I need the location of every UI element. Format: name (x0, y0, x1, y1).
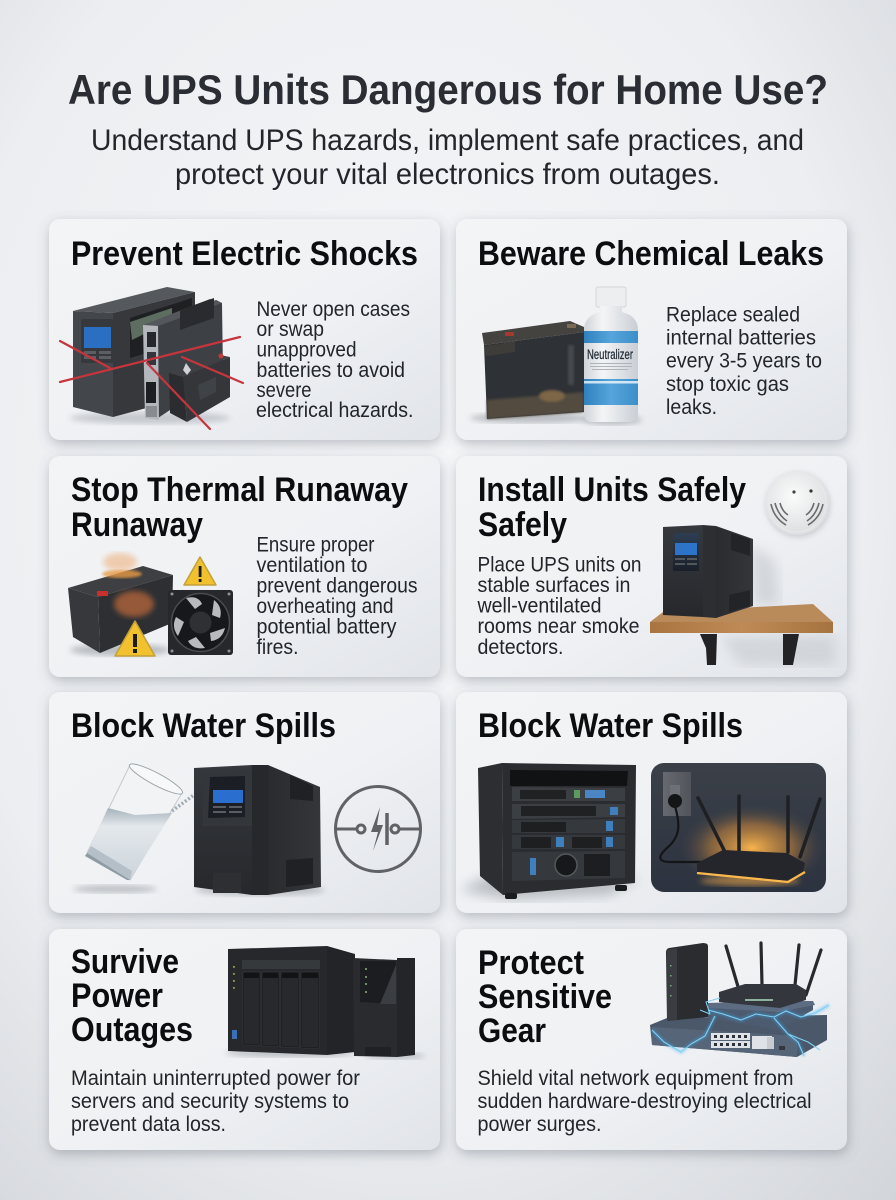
text: stop thermal runaway: fires. (256, 636, 298, 659)
heading: block water spills: Block Water Spills (478, 707, 743, 745)
heading: block water spills: Block Water Spills (71, 707, 336, 745)
text: protect sensitive gear: sudden hardware-destroying electrical (478, 1090, 812, 1113)
icon: electric surge arcs (652, 998, 829, 1056)
illustration: network switch stack (650, 1001, 827, 1057)
text: prevent electric shocks: batteries to avoid (256, 359, 405, 382)
heading: stop thermal runaway: Runaway (71, 506, 203, 544)
icon: warning triangle lower (115, 621, 155, 656)
text: beware chemical leaks: Replace sealed (666, 304, 800, 326)
panel: stop thermal runaway (49, 456, 440, 677)
illustration: UPS unit (194, 765, 325, 896)
icon: cooling fan (168, 590, 233, 655)
title: Are UPS Units Dangerous for Home Use? (68, 66, 828, 113)
illustration: router with glowing base (651, 763, 826, 892)
text: survive power outages: prevent data loss. (71, 1113, 226, 1136)
heading: install units safely: Install Units Safely (478, 471, 746, 509)
text: beware chemical leaks: leaks. (666, 396, 717, 419)
bottle label: Neutralizer (587, 347, 633, 362)
text: beware chemical leaks: internal batteries (666, 326, 816, 350)
illustration: NAS drive enclosure (225, 946, 355, 1057)
heading: survive power outages (71, 943, 193, 1049)
illustration: overheating battery (68, 553, 173, 656)
panel: protect sensitive gear (456, 929, 847, 1150)
text: survive power outages: Maintain uninterrupted power for (71, 1067, 360, 1090)
illustration: router on stack (719, 943, 821, 1008)
text: stop thermal runaway: ventilation to (256, 554, 368, 577)
text: survive power outages (71, 1067, 360, 1136)
panel: block water spills (rack and router) (456, 692, 847, 913)
panel: survive power outages (49, 929, 440, 1150)
text: install units safely: well-ventilated (477, 594, 602, 618)
icon: smoke detector (765, 471, 830, 537)
text: survive power outages: servers and security systems to (71, 1090, 349, 1113)
heading: stop thermal runaway (71, 471, 408, 544)
text: stop thermal runaway (256, 534, 418, 659)
text: prevent electric shocks: electrical hazards. (256, 399, 414, 422)
heading: install units safely (478, 471, 746, 544)
heading: prevent electric shocks: Prevent Electric Shocks (71, 235, 418, 273)
text: beware chemical leaks: stop toxic gas (666, 373, 789, 396)
text: protect sensitive gear: Shield vital network equipment from (478, 1067, 794, 1090)
text: beware chemical leaks (666, 304, 822, 419)
illustration: server rack (460, 763, 640, 900)
illustration: tilted glass of water (73, 760, 198, 893)
text: install units safely: rooms near smoke (478, 615, 640, 638)
subtitle (91, 124, 804, 191)
illustration: modem (666, 943, 708, 1021)
text: prevent electric shocks (256, 298, 414, 422)
text: stop thermal runaway: prevent dangerous (256, 574, 418, 598)
illustration: neutralizer bottle (582, 287, 642, 425)
panel: block water spills (glass) (49, 692, 440, 913)
text: prevent electric shocks: severe (256, 379, 312, 402)
panel: install units safely (456, 456, 847, 677)
heading: protect sensitive gear (478, 944, 612, 1050)
illustration: compact UPS (353, 958, 425, 1059)
heading: protect sensitive gear: Gear (478, 1012, 546, 1050)
illustration: opened UPS and battery with red cross lines (60, 287, 243, 429)
text: beware chemical leaks: every 3-5 years to (666, 350, 822, 372)
illustration: UPS on wooden shelf (650, 525, 835, 665)
heading: stop thermal runaway: Stop Thermal Runaway (71, 471, 408, 509)
icon: circuit break symbol (336, 786, 420, 872)
heading: survive power outages: Survive (71, 943, 179, 981)
text: install units safely (477, 554, 642, 659)
text: stop thermal runaway: overheating and (256, 595, 394, 618)
heading: survive power outages: Power (71, 977, 163, 1015)
heading: beware chemical leaks: Beware Chemical Leaks (478, 235, 824, 273)
text: prevent electric shocks: unapproved (256, 338, 356, 362)
text: prevent electric shocks: or swap (256, 318, 324, 341)
text: stop thermal runaway: potential battery (256, 616, 397, 638)
text: install units safely: stable surfaces in (478, 574, 630, 597)
text: prevent electric shocks: Never open cases (256, 298, 410, 321)
text: install units safely: Place UPS units on (478, 554, 642, 576)
text: stop thermal runaway: Ensure proper (256, 534, 375, 556)
panel: prevent electric shocks (49, 219, 440, 440)
text: protect sensitive gear: power surges. (478, 1113, 602, 1136)
subtitle: protect your vital electronics from outages. (175, 158, 720, 191)
heading: protect sensitive gear: Sensitive (478, 978, 612, 1016)
text: install units safely: detectors. (478, 636, 564, 659)
subtitle: Understand UPS hazards, implement safe practices, and (91, 124, 804, 157)
panel: beware chemical leaks (456, 219, 847, 440)
illustration: corroded battery (470, 321, 590, 423)
text: protect sensitive gear (478, 1067, 812, 1136)
heading: survive power outages: Outages (71, 1011, 193, 1049)
icon: warning triangle upper (184, 557, 216, 585)
heading: protect sensitive gear: Protect (478, 944, 584, 982)
heading: install units safely: Safely (478, 506, 567, 544)
